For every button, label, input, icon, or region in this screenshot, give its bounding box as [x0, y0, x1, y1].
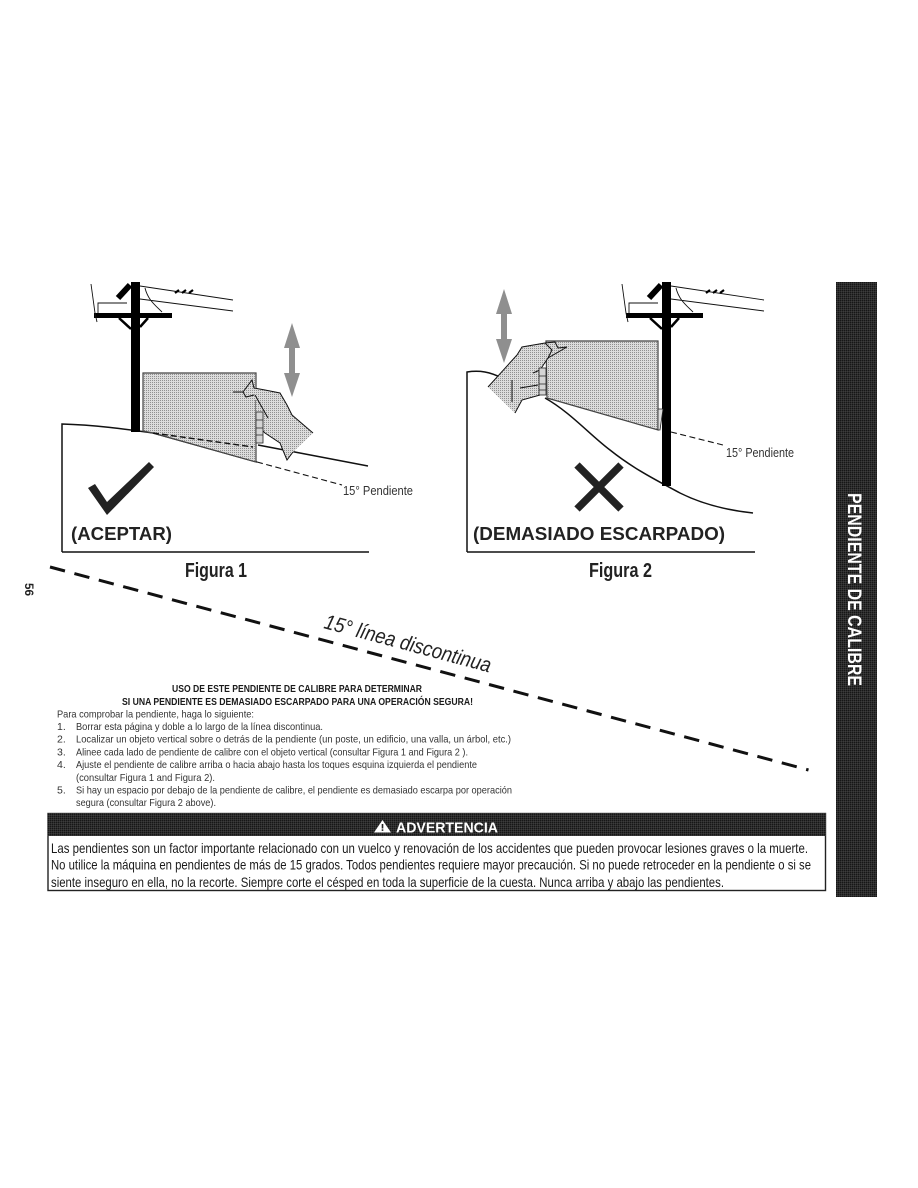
instructions list: Si hay un espacio por debajo de la pendiente de calibre, el pendiente es demasiado escarpa por operación: [76, 784, 512, 796]
icon: check mark: [88, 462, 154, 515]
instructions list: 3.: [57, 746, 66, 758]
caption: figura 1: Figura 1: [185, 560, 247, 582]
arrow: up and down adjust: [496, 289, 512, 363]
ground slope: [467, 371, 755, 552]
text block: instructions: [57, 684, 512, 809]
icon: hand holding gauge: [233, 380, 313, 460]
side tab label: PENDIENTE DE CALIBRE: [843, 493, 864, 686]
dashed slope line to label: [671, 432, 723, 445]
instructions heading: USO DE ESTE PENDIENTE DE CALIBRE PARA DETERMINAR: [172, 684, 423, 695]
icon: utility pole: [622, 282, 764, 486]
15 degree fold line: [50, 567, 808, 770]
instructions list: Borrar esta página y doble a lo largo de la línea discontinua.: [76, 721, 323, 733]
label: too steep: (DEMASIADO ESCARPADO): [473, 524, 725, 544]
label: accept: (ACEPTAR): [71, 524, 172, 544]
gauge sheet: [546, 341, 658, 430]
instructions list: 5.: [57, 784, 66, 796]
label: slope: 15° Pendiente: [726, 445, 794, 460]
warning box: [48, 814, 826, 890]
instructions list: (consultar Figura 1 and Figura 2).: [76, 772, 215, 784]
panel: warning: [48, 813, 826, 890]
ground slope: [62, 424, 369, 552]
instructions list: Alinee cada lado de pendiente de calibre con el objeto vertical (consultar Figura 1 and Figura 2 ).: [76, 746, 468, 758]
page number: 56: [22, 583, 36, 596]
dashed slope line to label: [257, 462, 342, 485]
instructions list: Localizar un objeto vertical sobre o detrás de la pendiente (un poste, un edificio, una valla, un árbol, etc.): [76, 734, 511, 746]
side tab background: [836, 282, 877, 897]
gauge sheet: [143, 373, 256, 462]
instructions list: 4.: [57, 759, 66, 771]
icon: hand holding gauge: [488, 342, 567, 413]
instructions heading: [122, 684, 473, 708]
dashed slope line inside gauge: [153, 433, 253, 447]
instructions list: 1.: [57, 721, 66, 733]
warning text: [51, 840, 811, 890]
panel: figure 1: [62, 282, 413, 582]
instructions list: 2.: [57, 734, 66, 746]
instructions heading: SI UNA PENDIENTE ES DEMASIADO ESCARPADO PARA UNA OPERACIÓN SEGURA!: [122, 695, 473, 708]
warning title: ADVERTENCIA: [396, 820, 498, 836]
gauge fold: [658, 409, 663, 430]
panel: figure 2: [467, 282, 794, 582]
instructions list: [57, 708, 512, 809]
warning text: siente inseguro en ella, no la recorte. Siempre corte el césped en toda la superficie de la cuesta. Nunca arriba y abajo las pendientes.: [51, 874, 724, 890]
instructions list: Ajuste el pendiente de calibre arriba o hacia abajo hasta los toques esquina izquierda el pendiente: [76, 759, 477, 771]
icon: cross mark: [577, 465, 621, 509]
panel: side tab: [836, 282, 877, 897]
fold line label: 15° línea discontinua: [322, 611, 494, 677]
arrow: up and down adjust: [284, 323, 300, 397]
warning header bar: [48, 813, 826, 836]
instructions list: Para comprobar la pendiente, haga lo siguiente:: [57, 708, 254, 720]
caption: figura 2: Figura 2: [589, 560, 652, 582]
icon: utility pole: [91, 282, 233, 432]
label: slope: 15° Pendiente: [343, 483, 413, 498]
instructions list: segura (consultar Figura 2 above).: [76, 797, 216, 809]
icon: warning triangle: [374, 820, 391, 832]
